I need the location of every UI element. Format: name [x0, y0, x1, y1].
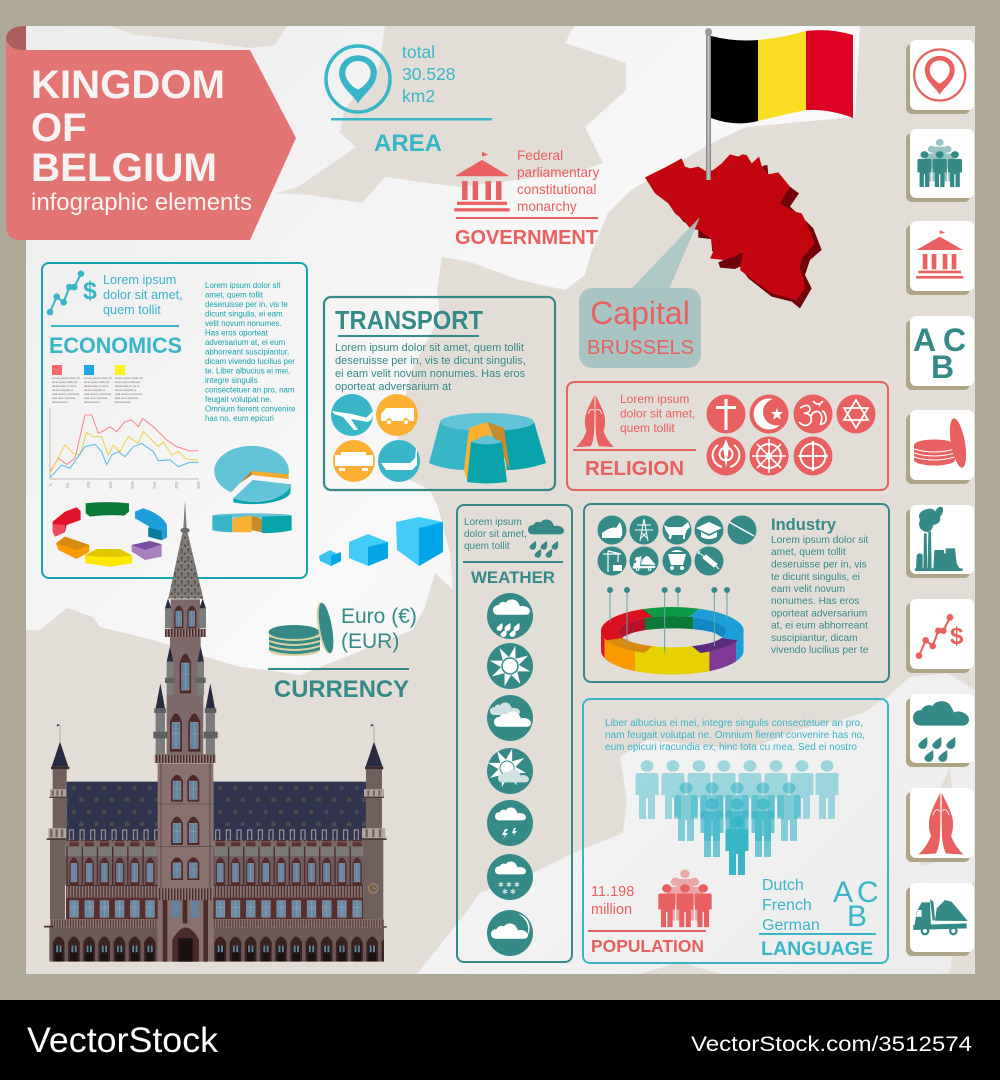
industry text: eam velit novum — [771, 584, 845, 595]
economics body text: Has eros oporteat — [205, 328, 269, 338]
people pictogram — [636, 760, 838, 875]
Belgium map — [645, 154, 822, 308]
chart legend: Has eros oporteat — [115, 396, 138, 400]
area block — [326, 42, 492, 157]
icon: stadium — [598, 516, 626, 544]
central tower — [153, 500, 218, 962]
side tile: religion — [906, 788, 974, 862]
currency text — [341, 605, 417, 653]
language heading: LANGUAGE — [761, 938, 873, 960]
religion text: Lorem ipsum — [620, 392, 689, 406]
icon: weather cloud — [528, 519, 564, 558]
icon: cross — [706, 394, 746, 434]
icon: graduation cap — [694, 516, 724, 544]
chart legend: Lorem ipsum dolor sit — [84, 376, 112, 380]
chart legend: amet quem tollit per — [84, 380, 109, 384]
icon: bus — [376, 394, 418, 436]
industry text: amet, quem tollit — [771, 547, 846, 558]
chart legend: dicunt singulis ei — [84, 388, 106, 392]
chart legend: Lorem ipsum dolor sit — [52, 376, 80, 380]
icon: power pylon — [630, 516, 658, 544]
icon: government building — [454, 152, 510, 211]
chart legend: Lorem ipsum dolor sit — [115, 376, 143, 380]
side tile: economy — [906, 599, 974, 673]
line chart: 200 — [130, 481, 135, 489]
line chart: 0 — [48, 483, 53, 486]
economics intro: Lorem ipsum — [103, 273, 176, 287]
right corner tower — [361, 724, 387, 928]
pie chart — [214, 446, 291, 504]
language list: Dutch — [762, 877, 804, 894]
area heading: AREA — [374, 130, 442, 157]
left wing — [49, 782, 158, 962]
government heading: GOVERNMENT — [455, 227, 598, 249]
economics body text: feugait volutpat ne. — [205, 395, 272, 404]
flat pie section — [212, 513, 292, 533]
icon: cow — [662, 516, 692, 544]
footer logo: VectorStock — [27, 1021, 219, 1060]
chart legend — [52, 365, 143, 404]
capital box: Capital — [590, 295, 690, 331]
icon: red crowd — [658, 870, 712, 927]
economics body text: Omnium fierent convenire — [205, 404, 296, 414]
language letters: A — [833, 876, 853, 909]
economics body text: has no, eum epicuri — [205, 414, 274, 423]
icon: sun and cloud — [483, 744, 533, 794]
icon: circle cross — [794, 436, 832, 476]
industry text: at, ei eum abhorreant — [771, 620, 868, 632]
chart legend: amet quem tollit per — [52, 380, 77, 384]
turrets — [153, 598, 218, 754]
economics heading: ECONOMICS — [49, 333, 182, 358]
icon: map pin — [326, 46, 390, 112]
religion text: quem tollit — [620, 421, 675, 435]
icon: snow: ✱ — [514, 881, 520, 889]
economics body text: adversarium at, ei eum — [205, 338, 286, 347]
language list — [762, 877, 820, 934]
industry text: te dicunt singulis, ei — [771, 572, 860, 583]
population value: 11.198 — [591, 884, 634, 900]
economics intro — [103, 273, 183, 317]
economics body text — [205, 281, 296, 423]
industry text: suscipiantur, dicam — [771, 633, 858, 644]
icon: snow: ✱ — [502, 888, 508, 896]
currency text: Euro (€) — [341, 605, 417, 628]
right wing — [213, 782, 384, 962]
icon: clock — [369, 884, 378, 893]
side tile: language: B — [931, 349, 954, 385]
industry text: Lorem ipsum dolor sit — [771, 535, 869, 546]
title text — [31, 63, 252, 216]
side tile: language: A — [913, 322, 936, 358]
population heading: POPULATION — [591, 936, 704, 956]
transport text: oporteat adversarium at — [335, 381, 451, 393]
capital box — [579, 288, 701, 368]
government text: parliamentary — [517, 165, 600, 180]
icon: praying hands — [576, 395, 614, 447]
chart legend: deseruisse in vis te — [84, 384, 109, 388]
line chart: 350 — [196, 481, 201, 489]
title text: BELGIUM — [31, 146, 217, 190]
title text: infographic elements — [31, 189, 252, 216]
chart legend: adversarium — [115, 400, 131, 404]
transport heading: TRANSPORT — [335, 307, 483, 335]
government text: Federal — [517, 148, 563, 163]
population text: Liber albucius ei mei, integre singulis consectetuer an pro, — [605, 718, 863, 729]
industry text: vivendo lucilius per te — [771, 645, 869, 656]
icon: moon and cloud — [487, 910, 533, 956]
capital box: BRUSSELS — [587, 337, 694, 359]
area value text: km2 — [402, 86, 435, 106]
side tile: language: C — [943, 322, 966, 358]
transport text: deseruisse per in, vis te dicunt singulis, — [335, 355, 526, 367]
population value: million — [591, 902, 632, 918]
population text — [605, 718, 865, 753]
language letters: B — [847, 900, 867, 933]
map: Ireland — [110, 26, 287, 48]
icon: train — [333, 440, 375, 482]
language list: German — [762, 917, 820, 934]
industry text — [771, 535, 869, 656]
religion text: dolor sit amet, — [620, 406, 695, 420]
industry text: oporteat adversarium — [771, 608, 867, 620]
icon: trend and dollar: $ — [83, 277, 97, 305]
economics body text: Lorem ipsum dolor sit — [205, 281, 281, 290]
line chart: 250 — [152, 481, 157, 489]
panel: religion — [567, 382, 888, 490]
economics body text: integre singulis — [205, 376, 258, 385]
weather intro text: Lorem ipsum — [464, 517, 522, 528]
line chart: 300 — [174, 481, 179, 489]
chart legend: Has eros oporteat — [52, 396, 75, 400]
chart legend: dicunt singulis ei — [52, 388, 74, 392]
transport text: Lorem ipsum dolor sit amet, quem tollit — [335, 342, 524, 354]
industry text: deseruisse per in, vis — [771, 560, 867, 570]
chart legend: Has eros oporteat — [84, 396, 107, 400]
economics body text: consectetuer an pro, nam — [205, 386, 295, 394]
icon: coin stack — [268, 601, 336, 656]
economics intro: dolor sit amet, — [103, 288, 183, 302]
icon: snow: ✱ — [510, 888, 516, 896]
left corner tower — [44, 724, 69, 927]
government text — [517, 148, 600, 214]
icon: sun — [484, 640, 536, 692]
industry heading: Industry — [771, 516, 837, 534]
weather intro text: quem tollit — [464, 541, 510, 552]
icon: crescent and star — [750, 394, 788, 434]
area value text — [402, 42, 456, 106]
icon: snow: ✱ — [506, 881, 512, 889]
population value — [591, 884, 634, 918]
icon: ship — [378, 440, 420, 482]
icon: snow — [487, 854, 533, 900]
side tile: coins — [906, 410, 974, 484]
icon: storm — [487, 800, 533, 846]
icon: dump truck — [630, 546, 658, 576]
chart legend: adversarium — [84, 400, 100, 404]
economics intro: quem tollit — [103, 303, 161, 317]
language letters: C — [857, 876, 879, 909]
icon: syringe — [694, 546, 724, 576]
economics body text: deseruisse per in, vis te — [205, 300, 289, 309]
panel: transport — [324, 297, 555, 490]
currency text: (EUR) — [341, 630, 399, 653]
population text: nam feugait volutpat ne. Omnium fierent convenire has no, — [605, 730, 865, 741]
chart legend: deseruisse in vis te — [115, 384, 140, 388]
population text: eum epicuri iracundia ex, hinc tota cu mea. Sed ei nostro — [605, 742, 857, 753]
side tile: people — [906, 129, 974, 202]
icon: crane — [598, 546, 626, 576]
religion text — [620, 392, 695, 435]
panel: economics — [42, 263, 307, 578]
icon: trend and dollar — [47, 270, 97, 315]
industry text: nonumes. Has eros — [771, 596, 859, 607]
economics body text: dicam vivendo lucilius per — [205, 357, 295, 366]
weather intro text: dolor sit amet, — [464, 529, 527, 540]
3D ring chart with pins — [597, 587, 747, 677]
Belgian flag — [705, 28, 853, 180]
map: islands — [640, 767, 975, 974]
icon: rain — [487, 593, 533, 639]
government text: constitutional — [517, 182, 596, 197]
weather intro text — [464, 517, 527, 552]
line chart: 100 — [86, 481, 91, 489]
side tile: weather — [906, 694, 974, 767]
economics body text: amet, quem tollit — [205, 290, 264, 300]
chart legend: dicunt singulis ei — [115, 388, 137, 392]
chart legend: amet quem tollit per — [115, 380, 140, 384]
religion heading: RELIGION — [585, 458, 684, 480]
government text: monarchy — [517, 199, 577, 214]
currency heading: CURRENCY — [274, 677, 409, 703]
side tile: economy: $ — [950, 623, 964, 650]
economics body text: abhorreant suscipiantur, — [205, 348, 289, 356]
icon: khanda — [706, 436, 746, 476]
chart legend: adversarium — [52, 400, 68, 404]
map: England — [276, 26, 626, 203]
icon: mine cart — [662, 546, 692, 576]
side tile: location — [906, 40, 974, 114]
title text: KINGDOM — [31, 63, 225, 107]
weather heading: WEATHER — [471, 568, 555, 587]
side tile: government — [906, 221, 974, 295]
chart legend: deseruisse in vis te — [52, 384, 77, 388]
transport text: ei eam velit novum nonumes. Has eros — [335, 368, 526, 380]
title text: OF — [31, 106, 87, 150]
panel: industry — [584, 504, 889, 682]
area value text: total — [402, 42, 435, 62]
panel: population and language — [583, 699, 888, 963]
icon: dharma wheel — [750, 436, 788, 476]
icon: plane — [331, 394, 374, 436]
chart legend: velit novum nonumes — [52, 392, 80, 396]
economics body text: velit novum nonumes. — [205, 319, 282, 328]
language list: French — [762, 897, 812, 914]
chart legend: velit novum nonumes — [115, 392, 143, 396]
icon: clouds — [487, 695, 533, 741]
side tile: factory — [906, 505, 974, 578]
panel: weather — [457, 505, 572, 962]
footer url: VectorStock.com/3512574 — [691, 1032, 972, 1056]
segmented ring chart — [53, 502, 167, 567]
economics body text: te. Liber albucius ei mei, — [205, 366, 290, 376]
government block — [454, 148, 600, 249]
line chart: 150 — [108, 481, 113, 489]
line chart — [48, 408, 201, 489]
title banner — [6, 26, 296, 240]
icon: rifle — [728, 516, 756, 544]
3D pie with cut — [429, 413, 546, 484]
side tile: language — [906, 316, 974, 390]
town hall building — [44, 500, 387, 962]
currency block — [268, 601, 417, 703]
capital pointer — [631, 217, 700, 289]
icon: om — [794, 394, 832, 434]
language letters — [833, 876, 879, 933]
economics body text: dicunt singulis, ei eam — [205, 310, 283, 318]
cube bar chart — [319, 517, 443, 566]
transport text — [335, 342, 526, 393]
icon: snow: ✱ — [498, 881, 504, 889]
side tile: truck — [906, 883, 974, 956]
area value text: 30.528 — [402, 64, 456, 84]
footer bar — [0, 1000, 1000, 1080]
line chart: 50 — [65, 482, 70, 488]
chart legend: velit novum nonumes — [84, 392, 112, 396]
icon: star of David — [836, 394, 876, 434]
spire — [168, 500, 203, 599]
